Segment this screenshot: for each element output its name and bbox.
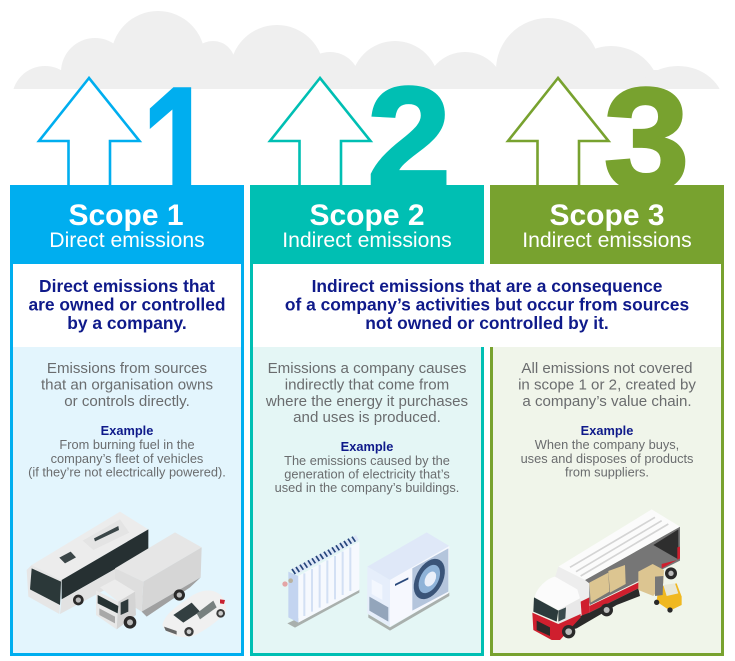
example text: scope 1: company’s fleet of vehicles xyxy=(51,451,203,466)
arrow: scope 1 xyxy=(39,78,140,187)
shared definition: scopes 2 and 3 xyxy=(253,264,721,347)
example text: scope 2: used in the company’s buildings. xyxy=(275,480,459,495)
description: scope 2: and uses is produced. xyxy=(293,409,441,426)
lorry xyxy=(96,532,202,629)
example text: scope 1: From burning fuel in the xyxy=(59,437,195,452)
lorry xyxy=(532,509,680,640)
example text: scope 3: uses and disposes of products xyxy=(521,451,693,466)
radiator xyxy=(282,535,359,628)
subheading: scope 3: Indirect emissions xyxy=(522,229,692,252)
example label: scope 2: Example xyxy=(341,439,393,454)
definition: scope 1: are owned or controlled xyxy=(28,294,226,314)
car xyxy=(162,591,226,637)
example text: scope 1: (if they’re not electrically powered). xyxy=(28,464,226,480)
description: scope 2: where the energy it purchases xyxy=(265,393,468,410)
large numeral 1: 1 xyxy=(140,47,217,259)
heading: scope 1: Scope 1 xyxy=(68,199,184,232)
heading: scope 3: Scope 3 xyxy=(549,199,665,232)
example text: scope 2: generation of electricity that’s xyxy=(284,466,450,482)
air-conditioning unit xyxy=(367,532,451,631)
cloud background xyxy=(14,11,720,89)
subheading: scope 2: Indirect emissions xyxy=(282,229,452,252)
large numeral 3: 3 xyxy=(604,58,689,220)
arrow: scope 2 xyxy=(270,78,370,187)
panel: scope 1 xyxy=(10,185,244,656)
illustration: radiator and air-conditioning unit xyxy=(282,532,451,631)
shared definition: scopes 2 and 3: Indirect emissions that are a consequence xyxy=(312,276,663,296)
heading: scope 2: Scope 2 xyxy=(309,199,425,232)
description: scope 3: All emissions not covered xyxy=(521,360,693,377)
illustration: delivery lorry and forklift xyxy=(532,509,682,640)
description: scope 3: a company’s value chain. xyxy=(522,393,692,410)
description: scope 1: Emissions from sources xyxy=(47,360,207,377)
large numeral 2: 2 xyxy=(367,58,451,219)
shared definition: scopes 2 and 3: not owned or controlled by it. xyxy=(365,313,609,333)
description: scope 1: or controls directly. xyxy=(64,393,190,410)
panel: scope 2 xyxy=(250,185,484,656)
arrow: scope 3 xyxy=(508,78,608,187)
subheading: scope 1: Direct emissions xyxy=(49,229,205,252)
example text: scope 2: The emissions caused by the xyxy=(284,453,450,468)
bus xyxy=(27,512,148,614)
description: scope 2: indirectly that come from xyxy=(285,376,449,394)
illustration: bus, lorry and car xyxy=(27,512,226,637)
definition: scope 1: by a company. xyxy=(67,313,187,333)
definition: scope 1: Direct emissions that xyxy=(39,276,215,296)
description: scope 2: Emissions a company causes xyxy=(268,360,466,377)
forklift xyxy=(654,576,682,613)
shared definition: scopes 2 and 3: of a company’s activities but occur from sources xyxy=(285,294,689,314)
example text: scope 3: from suppliers. xyxy=(565,464,649,480)
description: scope 1: that an organisation owns xyxy=(41,376,213,394)
pallets of boxes xyxy=(589,564,664,603)
panel: scope 3 xyxy=(490,185,724,656)
example text: scope 3: When the company buys, xyxy=(535,437,679,452)
example label: scope 1: Example xyxy=(101,423,153,438)
example label: scope 3: Example xyxy=(581,423,633,438)
description: scope 3: in scope 1 or 2, created by xyxy=(518,376,696,394)
